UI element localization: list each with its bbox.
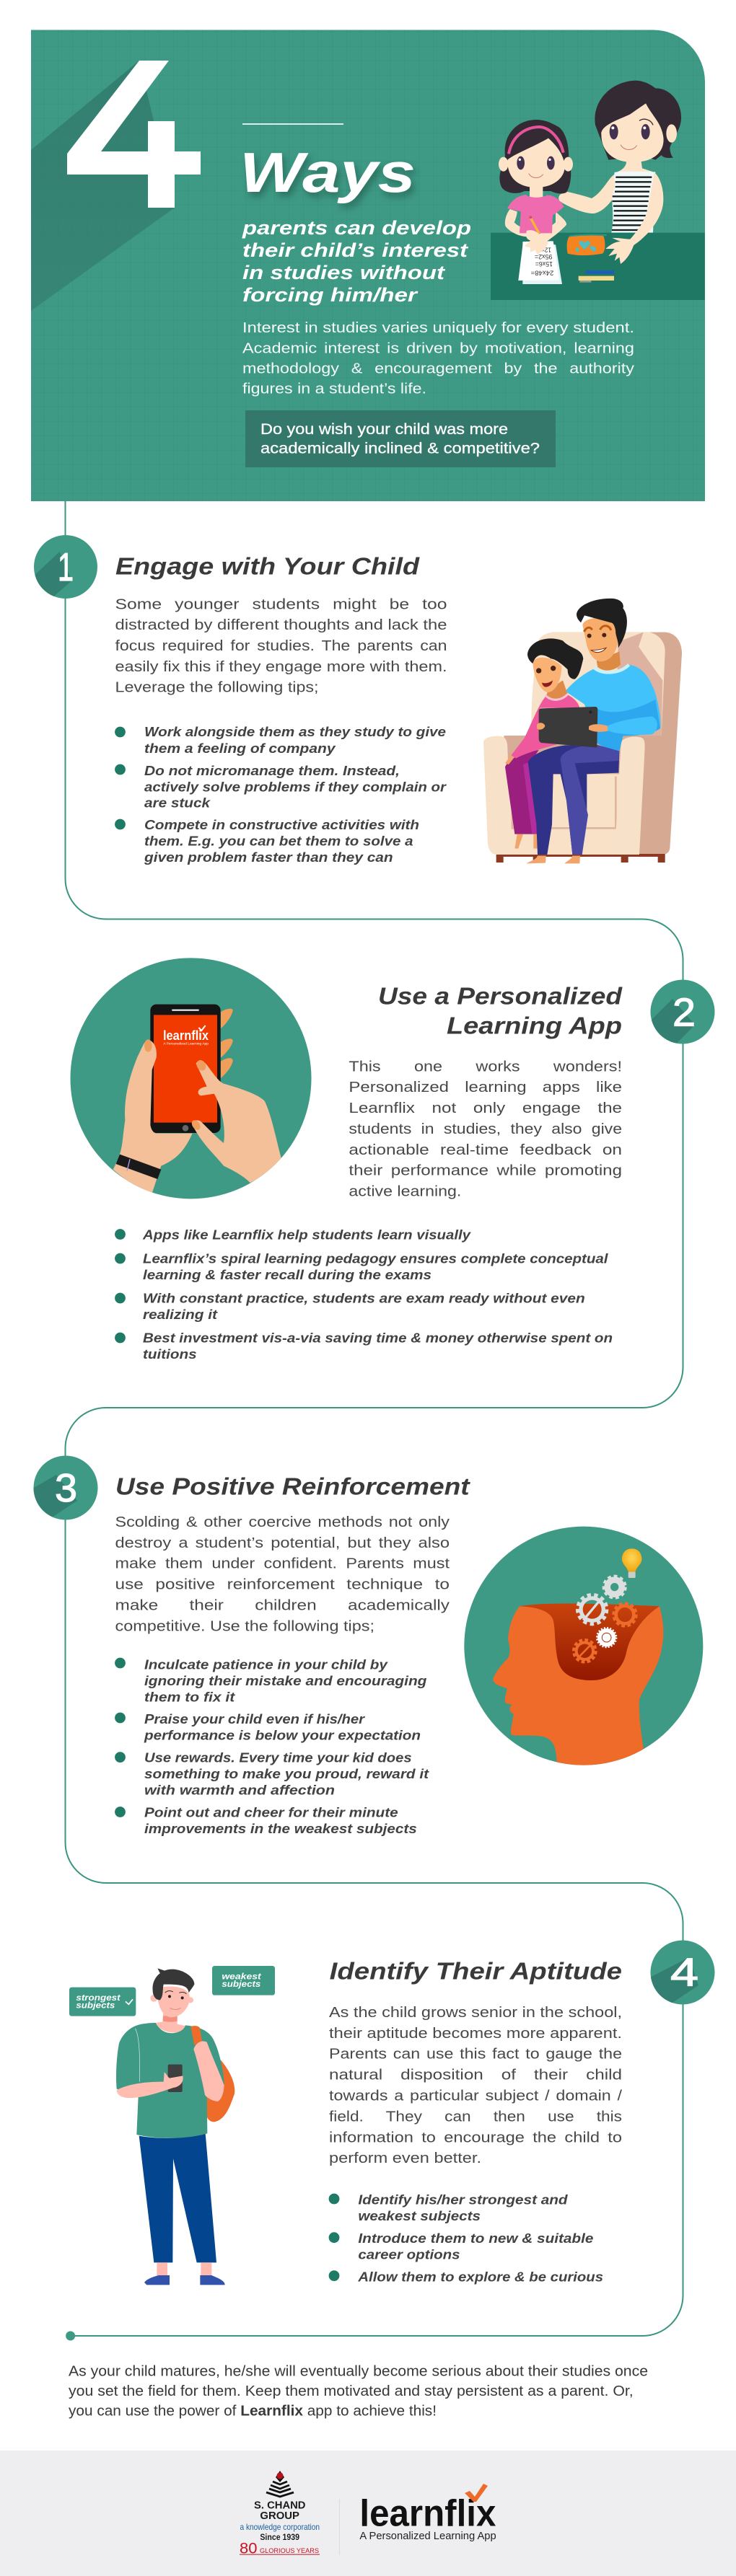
paragraph: competitive. Use the following tips; (115, 1618, 374, 1634)
tips list: them. E.g. you can bet them to solve a (144, 834, 413, 849)
tips list: Best investment vis-a-via saving time & money otherwise spent on (143, 1331, 613, 1346)
step 1 badge (34, 535, 97, 599)
pens (579, 270, 614, 283)
tips list: realizing it (143, 1307, 218, 1322)
paragraph: Scolding & other coercive methods not only (115, 1514, 450, 1530)
paragraph: actionable real-time feedback on (349, 1142, 622, 1158)
heading: Identify Their Aptitude (330, 1957, 622, 1985)
man legs (526, 745, 619, 863)
paragraph: make them under confident. Parents must (115, 1556, 450, 1572)
paragraph: natural disposition of their child (329, 2068, 622, 2083)
logo: Learnflix: A Personalized Learning App (359, 2530, 496, 2542)
girl legs (505, 750, 539, 849)
paragraph: Leverage the following tips; (115, 680, 319, 696)
intro paragraph: Academic interest is driven by motivation, learning (242, 340, 634, 356)
armchair (483, 632, 682, 863)
step 3 badge (33, 1455, 98, 1520)
tips list: improvements in the weakest subjects (144, 1821, 417, 1836)
tips list: learning & faster recall during the exams (143, 1267, 431, 1282)
tips list: Introduce them to new & suitable (358, 2231, 593, 2246)
step 4 badge: 4 (670, 1950, 698, 1995)
logo: S. Chand Group (240, 2471, 320, 2557)
paragraph: their aptitude becomes more apparent. (329, 2026, 622, 2042)
tips list: Point out and cheer for their minute (144, 1804, 398, 1819)
hero background (31, 30, 705, 501)
light bulb (622, 1548, 641, 1578)
worksheet: 15x6= (535, 260, 553, 268)
paragraph (329, 2005, 623, 2166)
step 2 badge (651, 979, 714, 1044)
girl hair (499, 120, 571, 193)
paragraph: Learnflix not only engage the (349, 1100, 622, 1116)
tips list: Praise your child even if his/her (144, 1711, 365, 1726)
backpack (205, 2060, 235, 2122)
girl torso (511, 694, 579, 759)
paragraph: make their children academically (115, 1597, 450, 1613)
gear: orange lower (574, 1640, 595, 1662)
pointing hand (190, 1059, 281, 1183)
wordmark: GROUP (260, 2510, 299, 2522)
illustration: mother and daughter studying (491, 81, 705, 300)
intro paragraph: methodology & encouragement by the authority (242, 361, 635, 376)
tips list: Apps like Learnflix help students learn visually (142, 1227, 471, 1242)
question callout: academically inclined & competitive? (260, 440, 540, 457)
panel: hero (31, 30, 705, 501)
illustration: hands holding phone with learning app (70, 958, 311, 1199)
mother face (601, 103, 677, 162)
tips list: are stuck (144, 795, 211, 811)
paragraph: This one works wonders! (349, 1059, 622, 1075)
tips list: with warmth and affection (144, 1783, 335, 1798)
paragraph: focus required for studies. The parents can (115, 638, 447, 654)
paragraph: use positive reinforcement technique to (115, 1577, 450, 1593)
girl face (499, 127, 573, 188)
long shadow of numeral (31, 61, 175, 311)
tips list: them to fix it (144, 1689, 235, 1704)
head (150, 1968, 194, 2022)
phone (150, 1005, 221, 1133)
raised arm (193, 2041, 224, 2101)
wordmark: Since 1939 (260, 2533, 299, 2542)
illustration: father and daughter on armchair (483, 599, 682, 863)
paragraph (115, 1514, 450, 1634)
label: weakest subjects (212, 1966, 275, 1995)
heading: Use a Personalized (378, 982, 623, 1009)
gear: white (597, 1628, 616, 1647)
paragraph: their performance while promoting (349, 1163, 622, 1179)
teal circle (70, 958, 311, 1199)
wordmark: 80 (240, 2541, 257, 2557)
title rule (242, 123, 343, 125)
gear: small grey (604, 1576, 625, 1597)
worksheet: 12x (541, 247, 551, 254)
paragraph: Some younger students might be too (115, 596, 447, 612)
heading: Learning App (447, 1013, 622, 1039)
subtitle: in studies without (242, 262, 445, 283)
footer background (0, 2451, 736, 2576)
label: strongest subjects (69, 1988, 136, 2016)
step 2 badge: 2 (673, 989, 696, 1034)
tips list: them a feeling of company (144, 741, 336, 756)
logo: Learnflix: learnflix (359, 2493, 496, 2535)
question callout: Do you wish your child was more (260, 421, 508, 438)
conclusion paragraph: As your child matures, he/she will eventually become serious about their studies once (69, 2363, 648, 2379)
timeline connector (65, 501, 683, 2336)
pencil and hand (525, 216, 548, 255)
phone: learnflix (163, 1028, 209, 1043)
intro paragraph (242, 319, 635, 397)
timeline end dot (66, 2331, 75, 2341)
tablet (539, 707, 597, 748)
big numeral 4 (67, 61, 201, 208)
phone: A Personalized Learning App (163, 1042, 209, 1046)
question callout (245, 410, 556, 467)
paragraph (349, 1059, 622, 1200)
tips list: Do not micromanage them. Instead, (144, 763, 400, 778)
legs and shoes (144, 2262, 225, 2285)
mother hair (595, 81, 681, 160)
intro paragraph: Interest in studies varies uniquely for every student. (242, 319, 634, 336)
tips list: career options (358, 2247, 460, 2262)
worksheet: 24x48= (531, 269, 553, 276)
mother arm (605, 172, 663, 264)
panel: step 4 (69, 1957, 623, 2285)
tips list: Use rewards. Every time your kid does (144, 1750, 412, 1765)
head silhouette (493, 1606, 663, 1767)
label: strongest subjects: subjects (76, 2000, 115, 2010)
title: Ways: Ways (240, 141, 416, 204)
label: strongest subjects: strongest (76, 1993, 121, 2003)
wordmark: a knowledge corporation (240, 2522, 320, 2532)
backpack strap (190, 2026, 202, 2045)
logo divider (339, 2499, 340, 2555)
arm holding phone (117, 2072, 183, 2098)
girl arms (505, 209, 566, 245)
paragraph: Parents can use this fact to gauge the (329, 2047, 622, 2063)
paragraph: As the child grows senior in the school, (329, 2005, 622, 2021)
girl neck (530, 185, 543, 198)
brain cavity (520, 1603, 660, 1680)
paragraph (115, 596, 447, 696)
logo: Learnflix (359, 2484, 496, 2542)
paragraph: easily fix this if they engage more with them. (115, 659, 447, 675)
illustration: head with gears and light bulb (464, 1527, 703, 1767)
desk (491, 233, 705, 300)
panel: step 3 (115, 1473, 703, 1836)
paragraph: active learning. (349, 1184, 461, 1200)
tips list (115, 1657, 429, 1836)
intro paragraph: figures in a student’s life. (242, 381, 426, 397)
heading: Engage with Your Child (115, 552, 420, 580)
label: weakest subjects: weakest (222, 1971, 262, 1981)
paragraph: Personalized learning apps like (349, 1080, 622, 1095)
paragraph: distracted by different thoughts and lack the (115, 617, 447, 633)
mother neck and torso (558, 160, 655, 233)
teal circle (464, 1527, 703, 1765)
paragraph: perform even better. (329, 2151, 481, 2166)
sleeve seam (135, 2029, 140, 2082)
panel: step 2 (70, 958, 623, 1362)
paragraph: information to encourage the child to (329, 2130, 622, 2145)
subtitle (242, 217, 471, 306)
tips list (115, 1227, 613, 1362)
tips list: Work alongside them as they study to give (144, 724, 446, 739)
man head (577, 599, 627, 661)
tips list: actively solve problems if they complain or (144, 779, 447, 794)
heading (378, 982, 623, 1039)
hands and forearm (505, 716, 657, 764)
step 1 badge: 1 (58, 544, 74, 589)
pencil pouch (567, 235, 607, 255)
subtitle: parents can develop (242, 217, 471, 239)
tips list: Compete in constructive activities with (144, 817, 419, 832)
subtitle: forcing him/her (242, 284, 419, 306)
girl shirt (507, 195, 564, 233)
wordmark: GLORIOUS YEARS (260, 2547, 319, 2554)
emblem (266, 2471, 294, 2497)
paragraph: field. They can then use this (329, 2109, 622, 2125)
conclusion paragraph (69, 2363, 648, 2420)
worksheet (518, 241, 562, 284)
subtitle: their child’s interest (242, 239, 468, 261)
girl head (527, 638, 583, 700)
tips list: Allow them to explore & be curious (357, 2269, 603, 2284)
heading: Use Positive Reinforcement (115, 1473, 471, 1500)
man torso (565, 651, 660, 751)
panel: step 1 (115, 552, 682, 865)
illustration: student with phone and subject labels (69, 1966, 275, 2285)
tips list: given problem faster than they can (144, 850, 393, 865)
phone (168, 2065, 183, 2092)
tips list: With constant practice, students are exam ready without even (143, 1291, 585, 1305)
paragraph: students in studies, they also give (349, 1121, 622, 1137)
step 3 badge: 3 (55, 1465, 77, 1510)
tips list: Inculcate patience in your child by (144, 1657, 388, 1672)
conclusion paragraph: you can use the power of Learnflix app to achieve this! (69, 2404, 437, 2420)
gear: orange upper (614, 1604, 636, 1626)
label: weakest subjects: subjects (222, 1979, 261, 1989)
tips list: ignoring their mistake and encouraging (144, 1673, 426, 1688)
tips list: weakest subjects (358, 2208, 481, 2223)
trousers (139, 2133, 216, 2262)
wordmark (240, 2500, 320, 2557)
tips list: Identify his/her strongest and (358, 2192, 569, 2207)
tips list: Learnflix’s spiral learning pedagogy ensures complete conceptual (143, 1250, 609, 1266)
wordmark: S. CHAND (254, 2500, 306, 2512)
tips list: performance is below your expectation (144, 1728, 421, 1743)
conclusion paragraph: you set the field for them. Keep them motivated and stay persistent as a parent. Or, (69, 2383, 634, 2399)
tips list (115, 724, 447, 865)
step 4 badge (651, 1940, 714, 2005)
back fingers (221, 1009, 233, 1078)
gear: large grey (578, 1595, 607, 1624)
holding hand (113, 1039, 193, 1195)
neck (156, 2013, 185, 2032)
tips list: tuitions (143, 1346, 197, 1362)
tips list: something to make you proud, reward it (144, 1766, 429, 1781)
worksheet: 95x2= (535, 253, 552, 260)
paragraph: destroy a student’s potential, but they also (115, 1535, 450, 1551)
tips list (329, 2192, 603, 2284)
paragraph: towards a particular subject / domain / (329, 2088, 623, 2104)
panel: footer (0, 2451, 736, 2576)
shirt (116, 2023, 224, 2138)
